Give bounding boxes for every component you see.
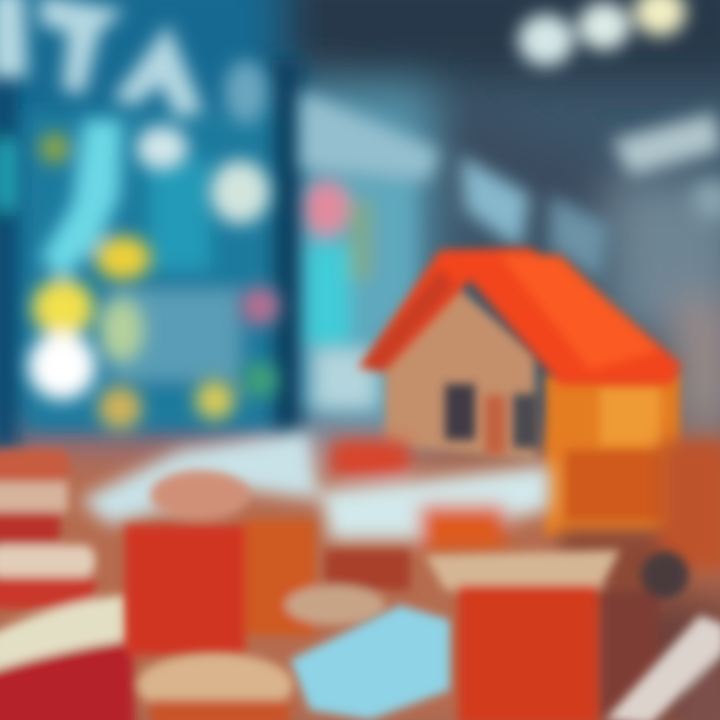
illustration: house [358, 248, 682, 535]
right large red cup [425, 550, 689, 720]
heading: blurred letterforms [0, 0, 268, 170]
panel: left data board [0, 60, 302, 450]
house windows and door [445, 384, 539, 455]
house walls [385, 285, 680, 535]
left striped stack [0, 450, 135, 720]
icon: data dots and markers [28, 120, 280, 430]
illustration: coin stacks [0, 430, 720, 720]
back pale stack tops [80, 430, 720, 600]
center red cup [125, 470, 410, 655]
icon: ceiling lights [518, 0, 720, 220]
front bottom coin [137, 653, 293, 720]
house roof [358, 248, 682, 385]
panel: right data board [300, 90, 610, 410]
front light-blue block [290, 605, 450, 720]
bottom right white stripe [605, 615, 720, 720]
